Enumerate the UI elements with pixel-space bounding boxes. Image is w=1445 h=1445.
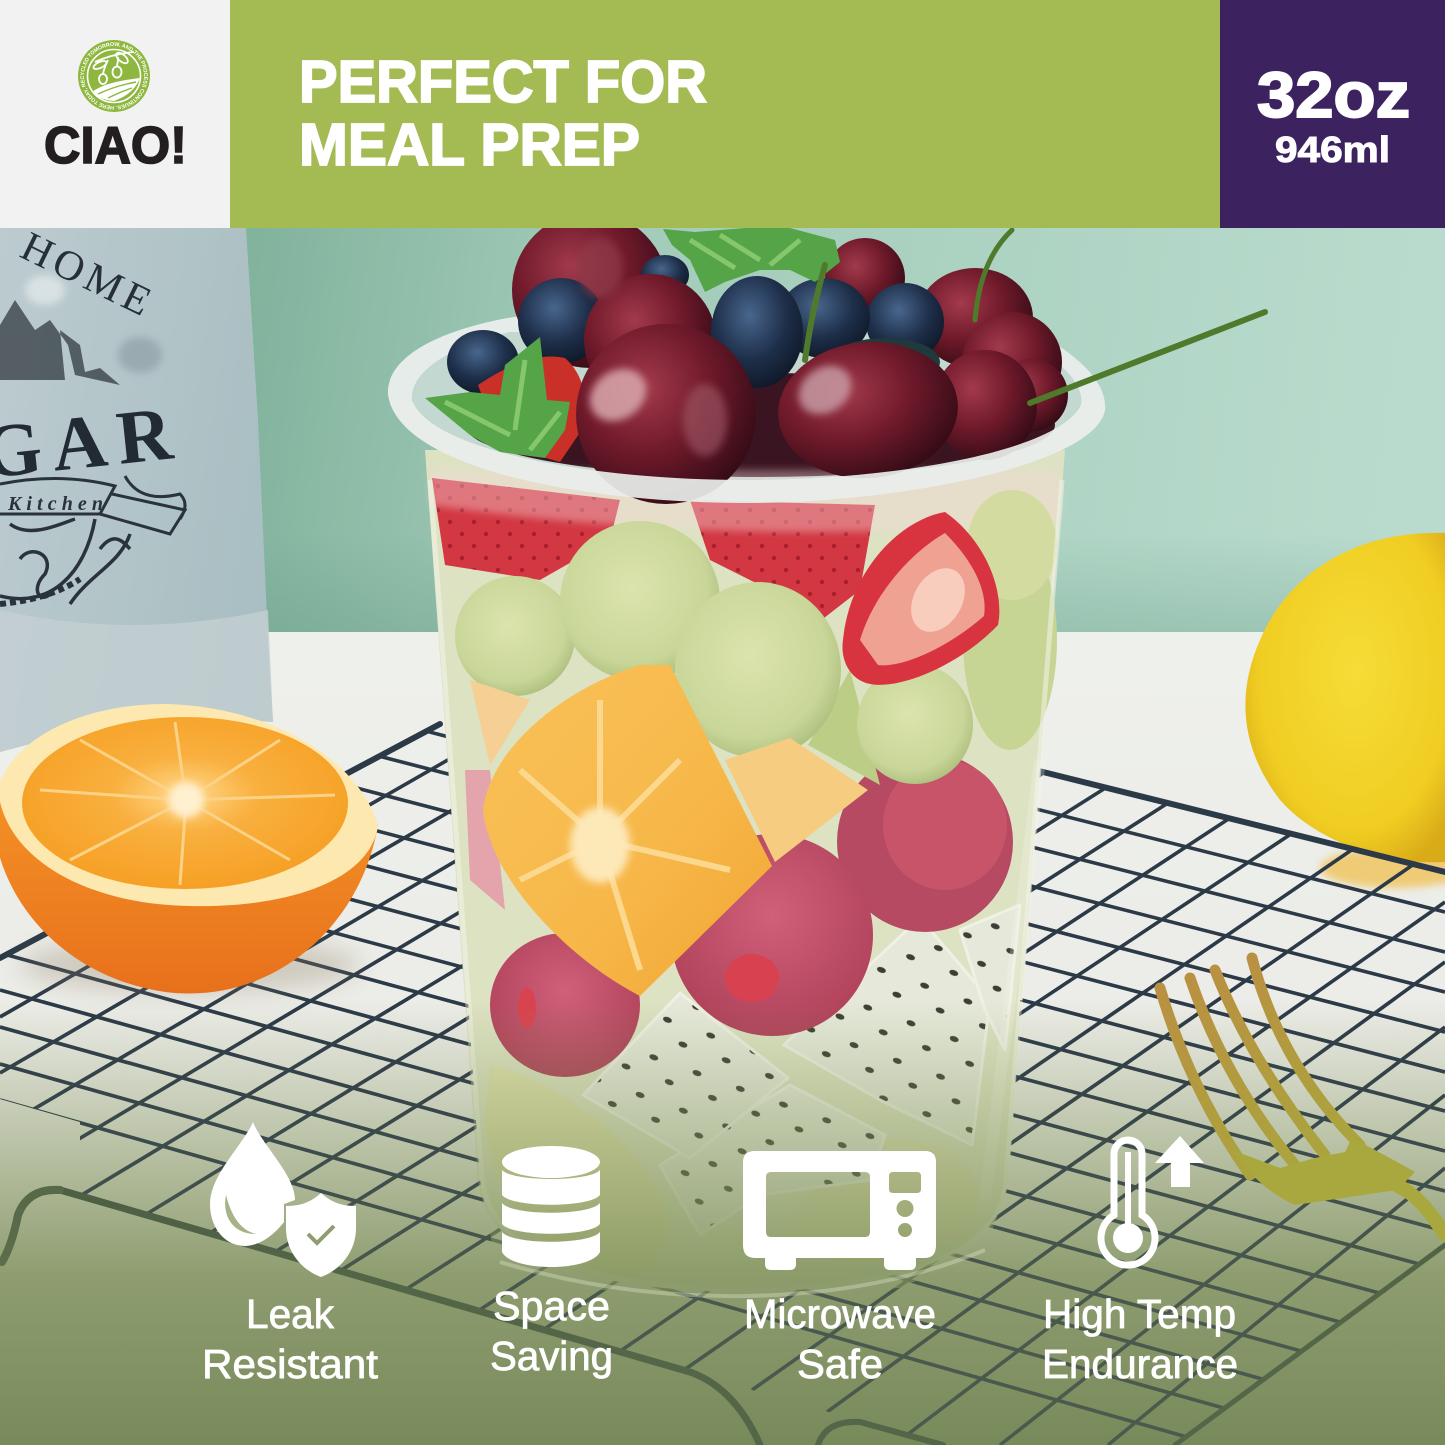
bottom banana slices — [485, 1065, 979, 1280]
label: Leak — [246, 1291, 334, 1337]
label: Endurance — [1042, 1341, 1238, 1387]
rack rims and feet — [0, 724, 1445, 1445]
strawberry pieces — [430, 470, 1060, 625]
label: Resistant — [202, 1341, 379, 1387]
header bar — [0, 0, 1445, 228]
logo panel — [0, 0, 230, 228]
cup wall highlights — [430, 480, 1062, 1290]
label: Saving — [490, 1333, 613, 1379]
label: Microwave — [744, 1291, 936, 1337]
brand name: CIAO! — [44, 117, 187, 175]
green title panel — [230, 0, 1220, 228]
cherry stems — [805, 230, 1265, 403]
title: MEAL PREP — [299, 112, 640, 178]
feature: leak resistant — [202, 1122, 379, 1387]
golden fork — [1160, 958, 1445, 1235]
cup front rim — [390, 402, 1106, 503]
icon: round olive logo: HERE TODAY, RECYCLED TOMORROW. AND THE PROCESS CONTINUES. — [80, 42, 148, 110]
wire cooling rack — [0, 731, 1445, 1375]
icon: stacked containers — [502, 1146, 600, 1267]
icon: thermometer with up arrow — [1101, 1136, 1204, 1265]
orange half — [0, 704, 378, 993]
melon balls — [455, 490, 1057, 785]
capacity ml: 946ml — [1275, 129, 1390, 170]
plastic cup filled with fruit — [388, 212, 1265, 1292]
flour sack with printed lettering: HOME — [14, 224, 158, 325]
strawberry slice — [842, 512, 999, 685]
label: Safe — [797, 1341, 883, 1387]
orange segments — [470, 665, 868, 996]
feature: space saving — [490, 1146, 613, 1379]
label: High Temp — [1043, 1291, 1236, 1337]
fruit mass behind rim — [465, 373, 1055, 477]
feature: high temp endurance — [1042, 1136, 1238, 1387]
title: PERFECT FOR — [299, 49, 707, 115]
cherries and blueberries on top — [447, 212, 1068, 504]
capacity oz: 32oz — [1257, 59, 1410, 131]
feature: microwave safe — [743, 1151, 936, 1387]
cup back rim — [388, 316, 1105, 503]
cup interior — [412, 332, 1081, 480]
bottom green gradient overlay — [0, 1000, 1445, 1445]
mint leaves — [425, 228, 840, 458]
icon: microwave — [743, 1151, 936, 1270]
watermelon balls — [465, 752, 1013, 1077]
dragon fruit — [583, 905, 1020, 1235]
lemon — [1245, 533, 1445, 888]
flour sack with printed lettering — [0, 224, 273, 752]
icon: water drop with shield — [210, 1122, 356, 1277]
purple size panel — [1220, 0, 1445, 228]
flour sack with printed lettering: Kitchen — [7, 493, 103, 515]
rack visible through the overlay — [0, 1000, 1445, 1445]
label: Space — [493, 1283, 610, 1329]
cup base glass ring — [500, 1250, 985, 1296]
